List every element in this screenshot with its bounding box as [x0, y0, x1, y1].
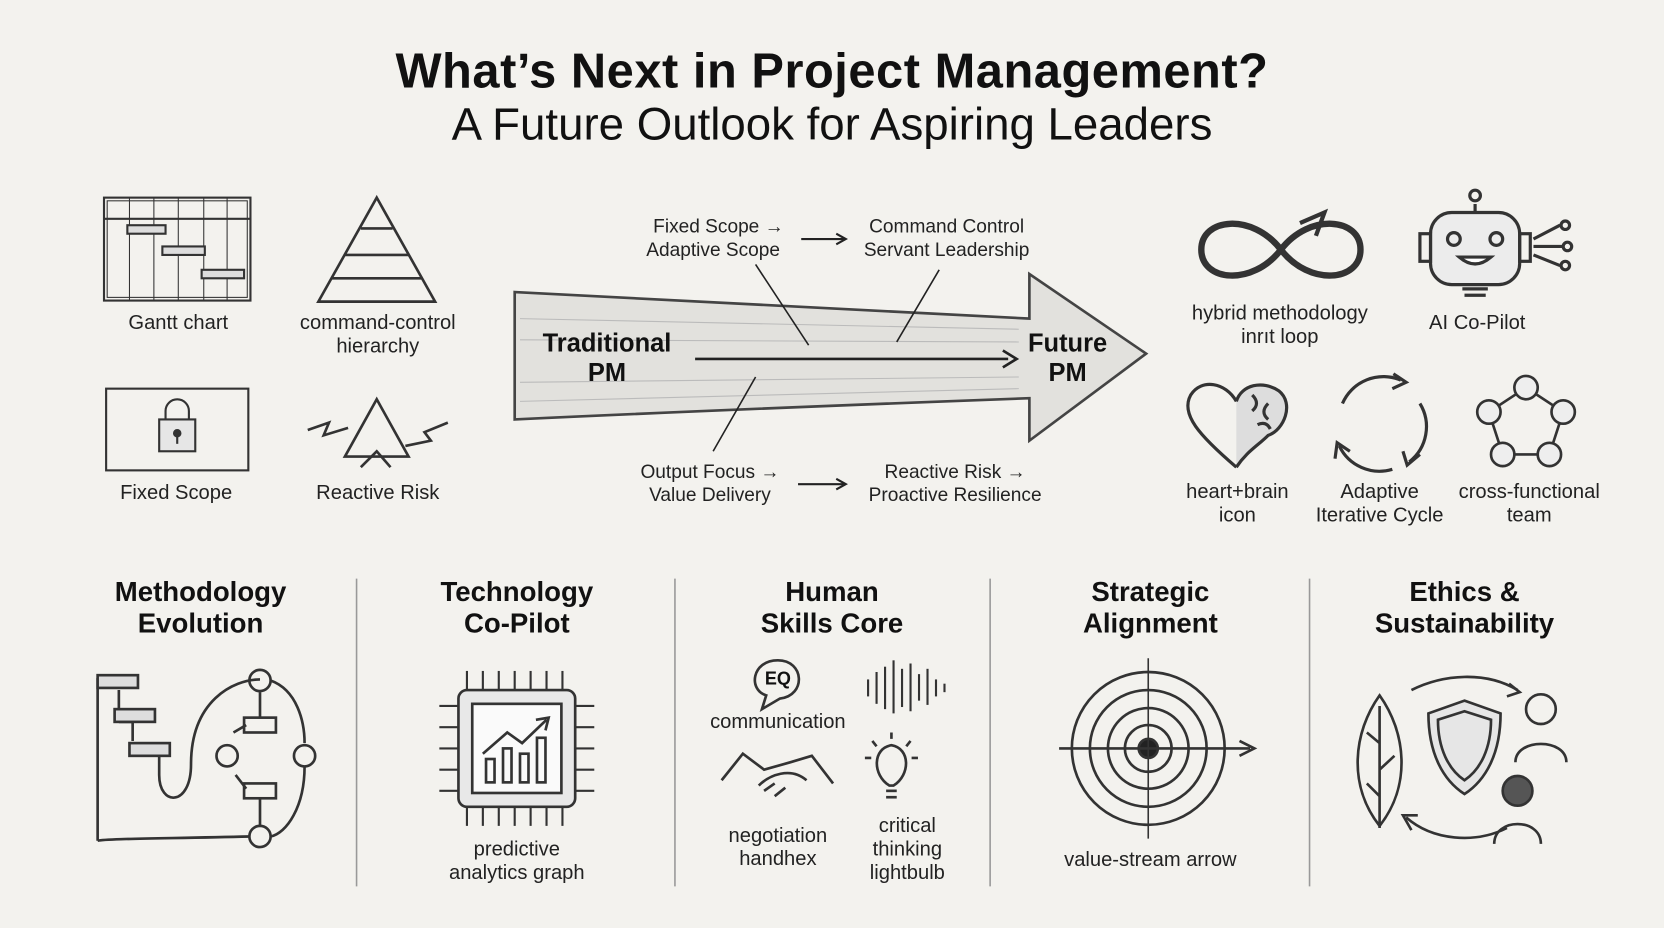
label: reactive risk: Reactive Risk: [316, 482, 440, 504]
icon: adaptive cycle: [1335, 374, 1426, 471]
panel: human skills core: Skills Core: [761, 608, 903, 639]
panel: ethics & sustainability: Sustainability: [1375, 608, 1555, 639]
title: [395, 44, 1269, 149]
panel: methodology evolution: Evolution: [138, 608, 263, 639]
icon: pyramid hierarchy: [318, 198, 435, 302]
panel: ethics & sustainability: Ethics &: [1409, 576, 1520, 607]
label: gantt chart: Gantt chart: [128, 312, 229, 334]
callout: scope and leadership shifts: Adaptive Scope: [646, 240, 780, 261]
label: heart+brain: heart+brain: [1186, 481, 1289, 503]
callout: value and risk shifts: Output Focus →: [640, 462, 779, 483]
label: adaptive iterative cycle: Adaptive: [1340, 481, 1419, 503]
panel: human skills core: [710, 576, 945, 884]
label: command-control hierarchy: hierarchy: [336, 336, 420, 358]
label: AI co-pilot: AI Co-Pilot: [1429, 312, 1526, 334]
label: hybrid methodology: hybrid methodology: [1192, 303, 1369, 325]
callout: value and risk shifts: [640, 377, 1042, 506]
callout: value and risk shifts: Reactive Risk →: [885, 462, 1026, 483]
label: fixed scope: Fixed Scope: [120, 482, 232, 504]
panel: strategic alignment: Alignment: [1083, 608, 1218, 639]
label: hybrid methodology: inrıt loop: [1241, 326, 1318, 348]
panel: strategic alignment: value-stream arrow: [1064, 849, 1237, 871]
panel: methodology evolution: [98, 576, 315, 847]
panel: human skills core: EQ: [765, 669, 791, 689]
label: adaptive iterative cycle: Iterative Cycle: [1316, 504, 1443, 526]
callout: scope and leadership shifts: [646, 217, 1029, 345]
panel: technology co-pilot: Technology: [440, 576, 594, 607]
panel: ethics & sustainability: [1358, 576, 1566, 844]
panel: technology co-pilot: predictive: [474, 839, 560, 861]
callout: value and risk shifts: Proactive Resilience: [869, 485, 1042, 506]
icon: cross-functional team: [1477, 376, 1575, 466]
panel: technology co-pilot: Co-Pilot: [464, 608, 570, 639]
icon: infinity loop: [1201, 212, 1360, 276]
panel: human skills core: critical: [879, 815, 936, 837]
label: cross-functional team: team: [1507, 504, 1552, 526]
callout: scope and leadership shifts: Command Control: [869, 217, 1024, 238]
title: What’s Next in Project Management?: [395, 44, 1269, 98]
big arrow: Traditional: [543, 330, 671, 358]
panel: technology co-pilot: analytics graph: [449, 862, 585, 884]
panel: human skills core: Human: [785, 576, 879, 607]
callout: value and risk shifts: Value Delivery: [649, 485, 771, 506]
big arrow: Future: [1028, 330, 1107, 358]
panel: human skills core: handhex: [739, 848, 817, 870]
big arrow: [515, 274, 1146, 441]
callout: scope and leadership shifts: Fixed Scope →: [653, 217, 784, 238]
label: command-control hierarchy: command-control: [300, 312, 456, 334]
panel: human skills core: communication: [710, 711, 846, 733]
panel: human skills core: thinking: [873, 839, 942, 861]
panel: technology co-pilot: [439, 576, 594, 884]
icon: fixed scope lock: [106, 389, 248, 470]
label: cross-functional team: cross-functional: [1459, 481, 1600, 503]
panel: human skills core: negotiation: [729, 825, 827, 847]
title: A Future Outlook for Aspiring Leaders: [452, 98, 1212, 149]
icon: reactive risk: [308, 399, 448, 467]
icon: AI robot: [1420, 190, 1572, 295]
label: heart+brain: icon: [1219, 504, 1256, 526]
panel: strategic alignment: Strategic: [1091, 576, 1209, 607]
panel: methodology evolution: Methodology: [115, 576, 287, 607]
icon: gantt chart: [104, 198, 250, 301]
big arrow: PM: [588, 359, 626, 387]
panel: strategic alignment: [1059, 576, 1254, 871]
callout: scope and leadership shifts: Servant Leadership: [864, 240, 1029, 261]
big arrow: PM: [1048, 359, 1087, 387]
icon: heart+brain: [1188, 384, 1287, 467]
panel: human skills core: lightbulb: [870, 862, 945, 884]
